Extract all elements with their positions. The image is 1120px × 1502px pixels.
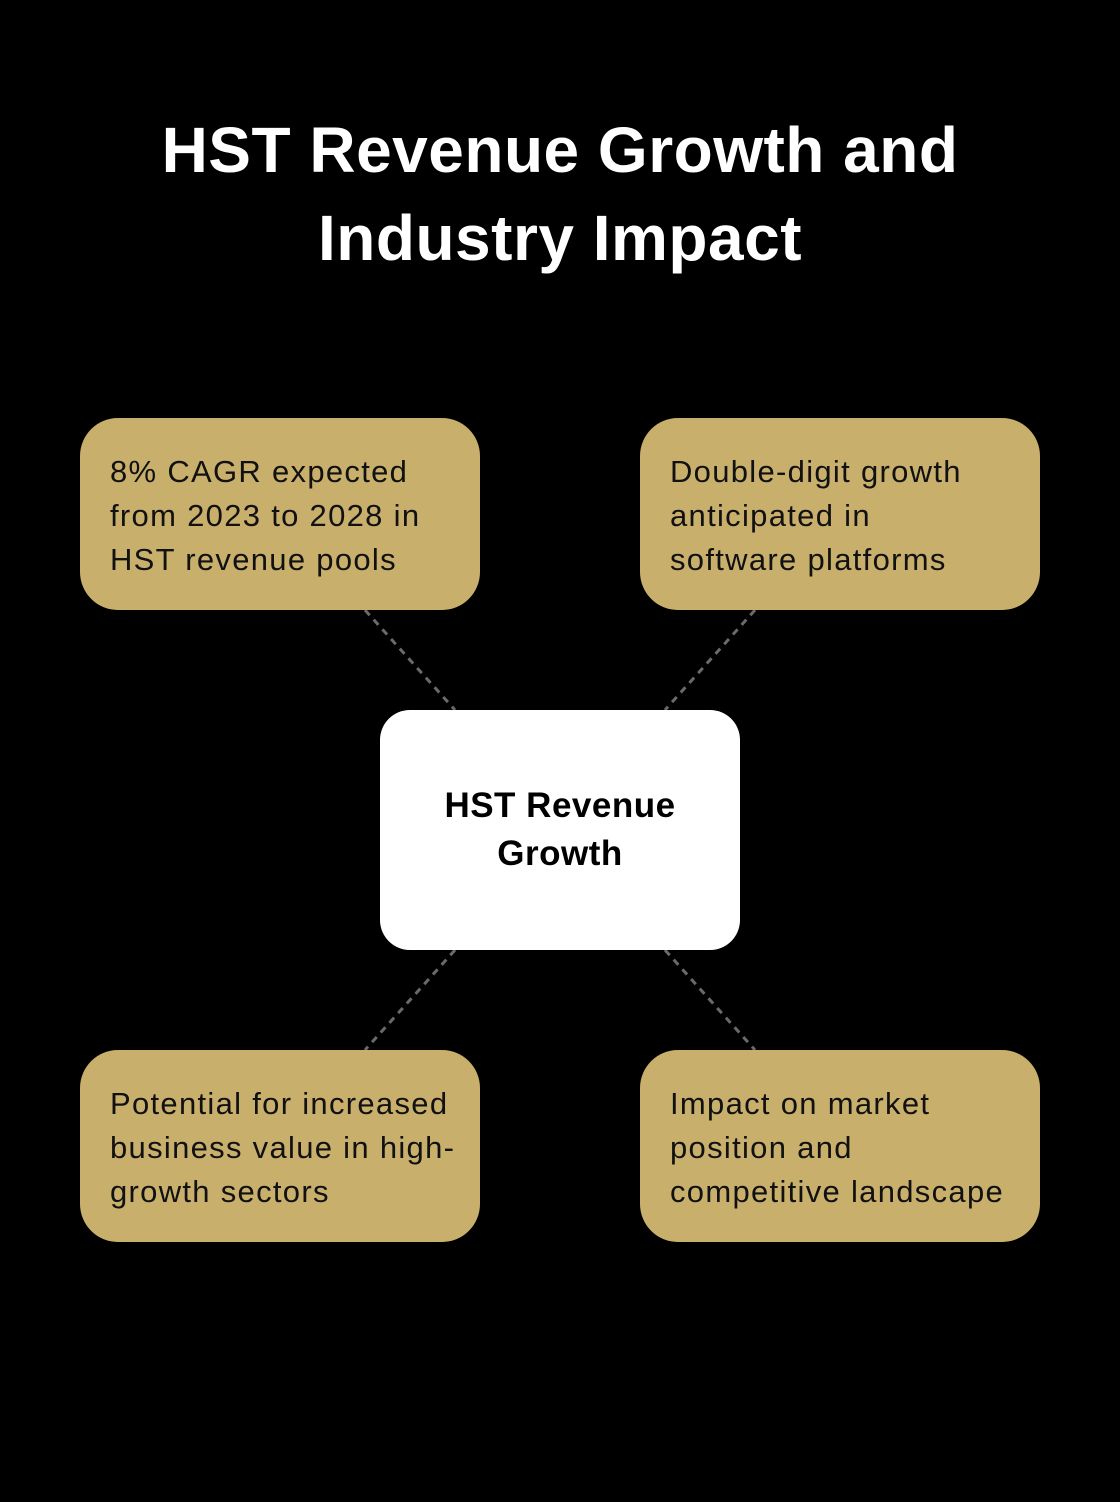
box: market position: position and	[670, 1130, 853, 1165]
box: market position: Impact on market	[670, 1086, 930, 1121]
box: software platforms: software platforms	[670, 542, 947, 577]
box: market position: competitive landscape	[670, 1174, 1004, 1209]
box: CAGR	[80, 418, 480, 610]
box: CAGR: 8% CAGR expected	[110, 454, 408, 489]
box: CAGR: HST revenue pools	[110, 542, 397, 577]
center node: Growth	[497, 834, 623, 873]
center node	[380, 710, 740, 950]
box: market position	[640, 1050, 1040, 1242]
box: business value: growth sectors	[110, 1174, 330, 1209]
center node: HST Revenue	[444, 786, 676, 825]
box: business value	[80, 1050, 480, 1242]
box: software platforms: anticipated in	[670, 498, 871, 533]
title: HST Revenue Growth and	[162, 114, 958, 186]
box: software platforms	[640, 418, 1040, 610]
box: business value: business value in high-	[110, 1130, 455, 1165]
box: software platforms: Double-digit growth	[670, 454, 962, 489]
title	[162, 114, 958, 274]
box: CAGR: from 2023 to 2028 in	[110, 498, 420, 533]
box: business value: Potential for increased	[110, 1086, 448, 1121]
title: Industry Impact	[318, 202, 802, 274]
